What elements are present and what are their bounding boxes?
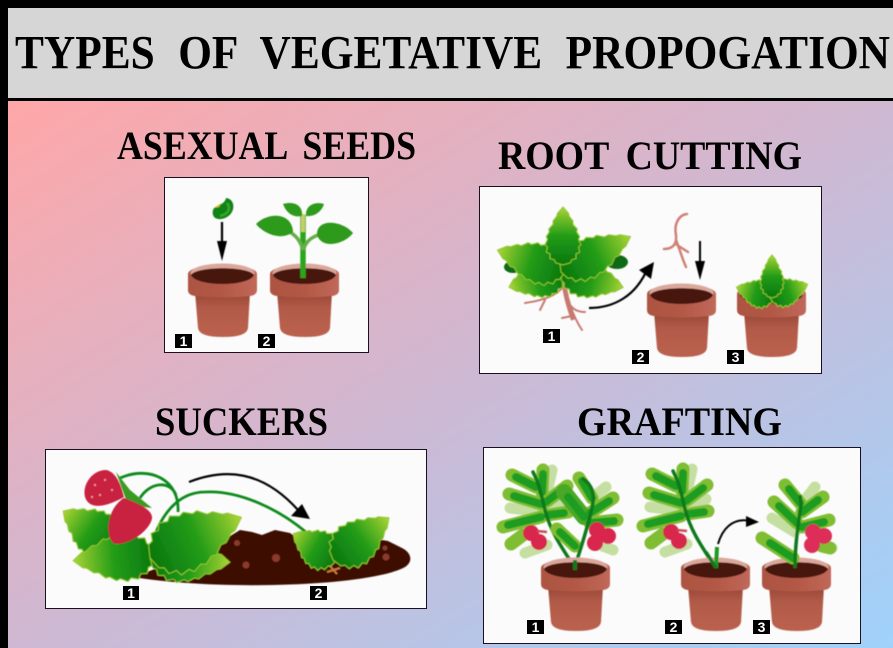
section: grafting xyxy=(484,399,860,644)
step label 2: 2 xyxy=(315,585,323,601)
step label 1: 1 xyxy=(127,585,135,601)
step label 1 xyxy=(175,333,192,349)
icon: seed xyxy=(213,198,233,219)
arrow: runner to new plant xyxy=(189,474,310,519)
step label 3 xyxy=(727,349,744,365)
step label 1 xyxy=(123,585,139,601)
panel: grafting xyxy=(484,448,860,644)
step label 2 xyxy=(258,333,275,349)
runner stems xyxy=(120,473,307,540)
icon: parent plant leaves xyxy=(49,490,254,586)
step label 2: 2 xyxy=(263,333,271,349)
step label 1: 1 xyxy=(180,333,188,349)
step label 1 xyxy=(543,328,560,344)
icon: pot one xyxy=(188,264,257,337)
icon: pot with new plant xyxy=(733,255,813,357)
step label 2 xyxy=(632,349,649,365)
step label 2: 2 xyxy=(637,349,645,365)
icon: new plantlet xyxy=(283,499,403,579)
step label 3: 3 xyxy=(732,349,740,365)
icon: leafy parent plant with roots xyxy=(491,207,640,330)
step label 3 xyxy=(753,619,770,635)
icon: grafted plant in pot xyxy=(762,485,832,631)
illustration: root cutting xyxy=(491,207,813,357)
panel: suckers xyxy=(46,450,426,608)
heading: grafting: GRAFTING xyxy=(577,399,782,444)
icon: strawberries xyxy=(84,470,152,544)
icon: pot with seedling xyxy=(256,203,353,337)
icon: pot two xyxy=(647,284,716,357)
arrow: down into pot xyxy=(695,241,705,280)
heading: suckers: SUCKERS xyxy=(155,399,328,444)
step label 2 xyxy=(310,585,327,601)
illustration: seed and seedling pots xyxy=(188,198,353,337)
step label 1: 1 xyxy=(548,328,556,344)
icon: plant with cut stem in pot xyxy=(643,469,750,631)
step label 1 xyxy=(527,619,544,635)
icon: full plant in pot xyxy=(503,470,617,631)
arrow: seed into pot xyxy=(217,222,227,261)
step label 3: 3 xyxy=(758,619,766,635)
panel: asexual seeds xyxy=(164,178,368,352)
heading: root cutting: ROOT CUTTING xyxy=(498,133,802,178)
step label 2 xyxy=(665,619,682,635)
section: root cutting xyxy=(480,133,822,374)
illustration: strawberry runner xyxy=(49,470,410,586)
soil mound xyxy=(133,530,410,585)
illustration: grafting xyxy=(503,469,832,631)
red fruit overlap xyxy=(108,498,152,544)
step label 1: 1 xyxy=(532,619,540,635)
arrow: graft transfer xyxy=(718,516,759,544)
icon: root cutting xyxy=(664,214,688,267)
title band xyxy=(8,8,893,101)
heading: asexual seeds: ASEXUAL SEEDS xyxy=(117,123,416,168)
panel: root cutting xyxy=(480,186,822,374)
section: asexual seeds xyxy=(117,123,416,352)
arrow: curved root to pot xyxy=(589,262,654,308)
section: suckers xyxy=(46,399,426,608)
step label 2: 2 xyxy=(670,619,678,635)
